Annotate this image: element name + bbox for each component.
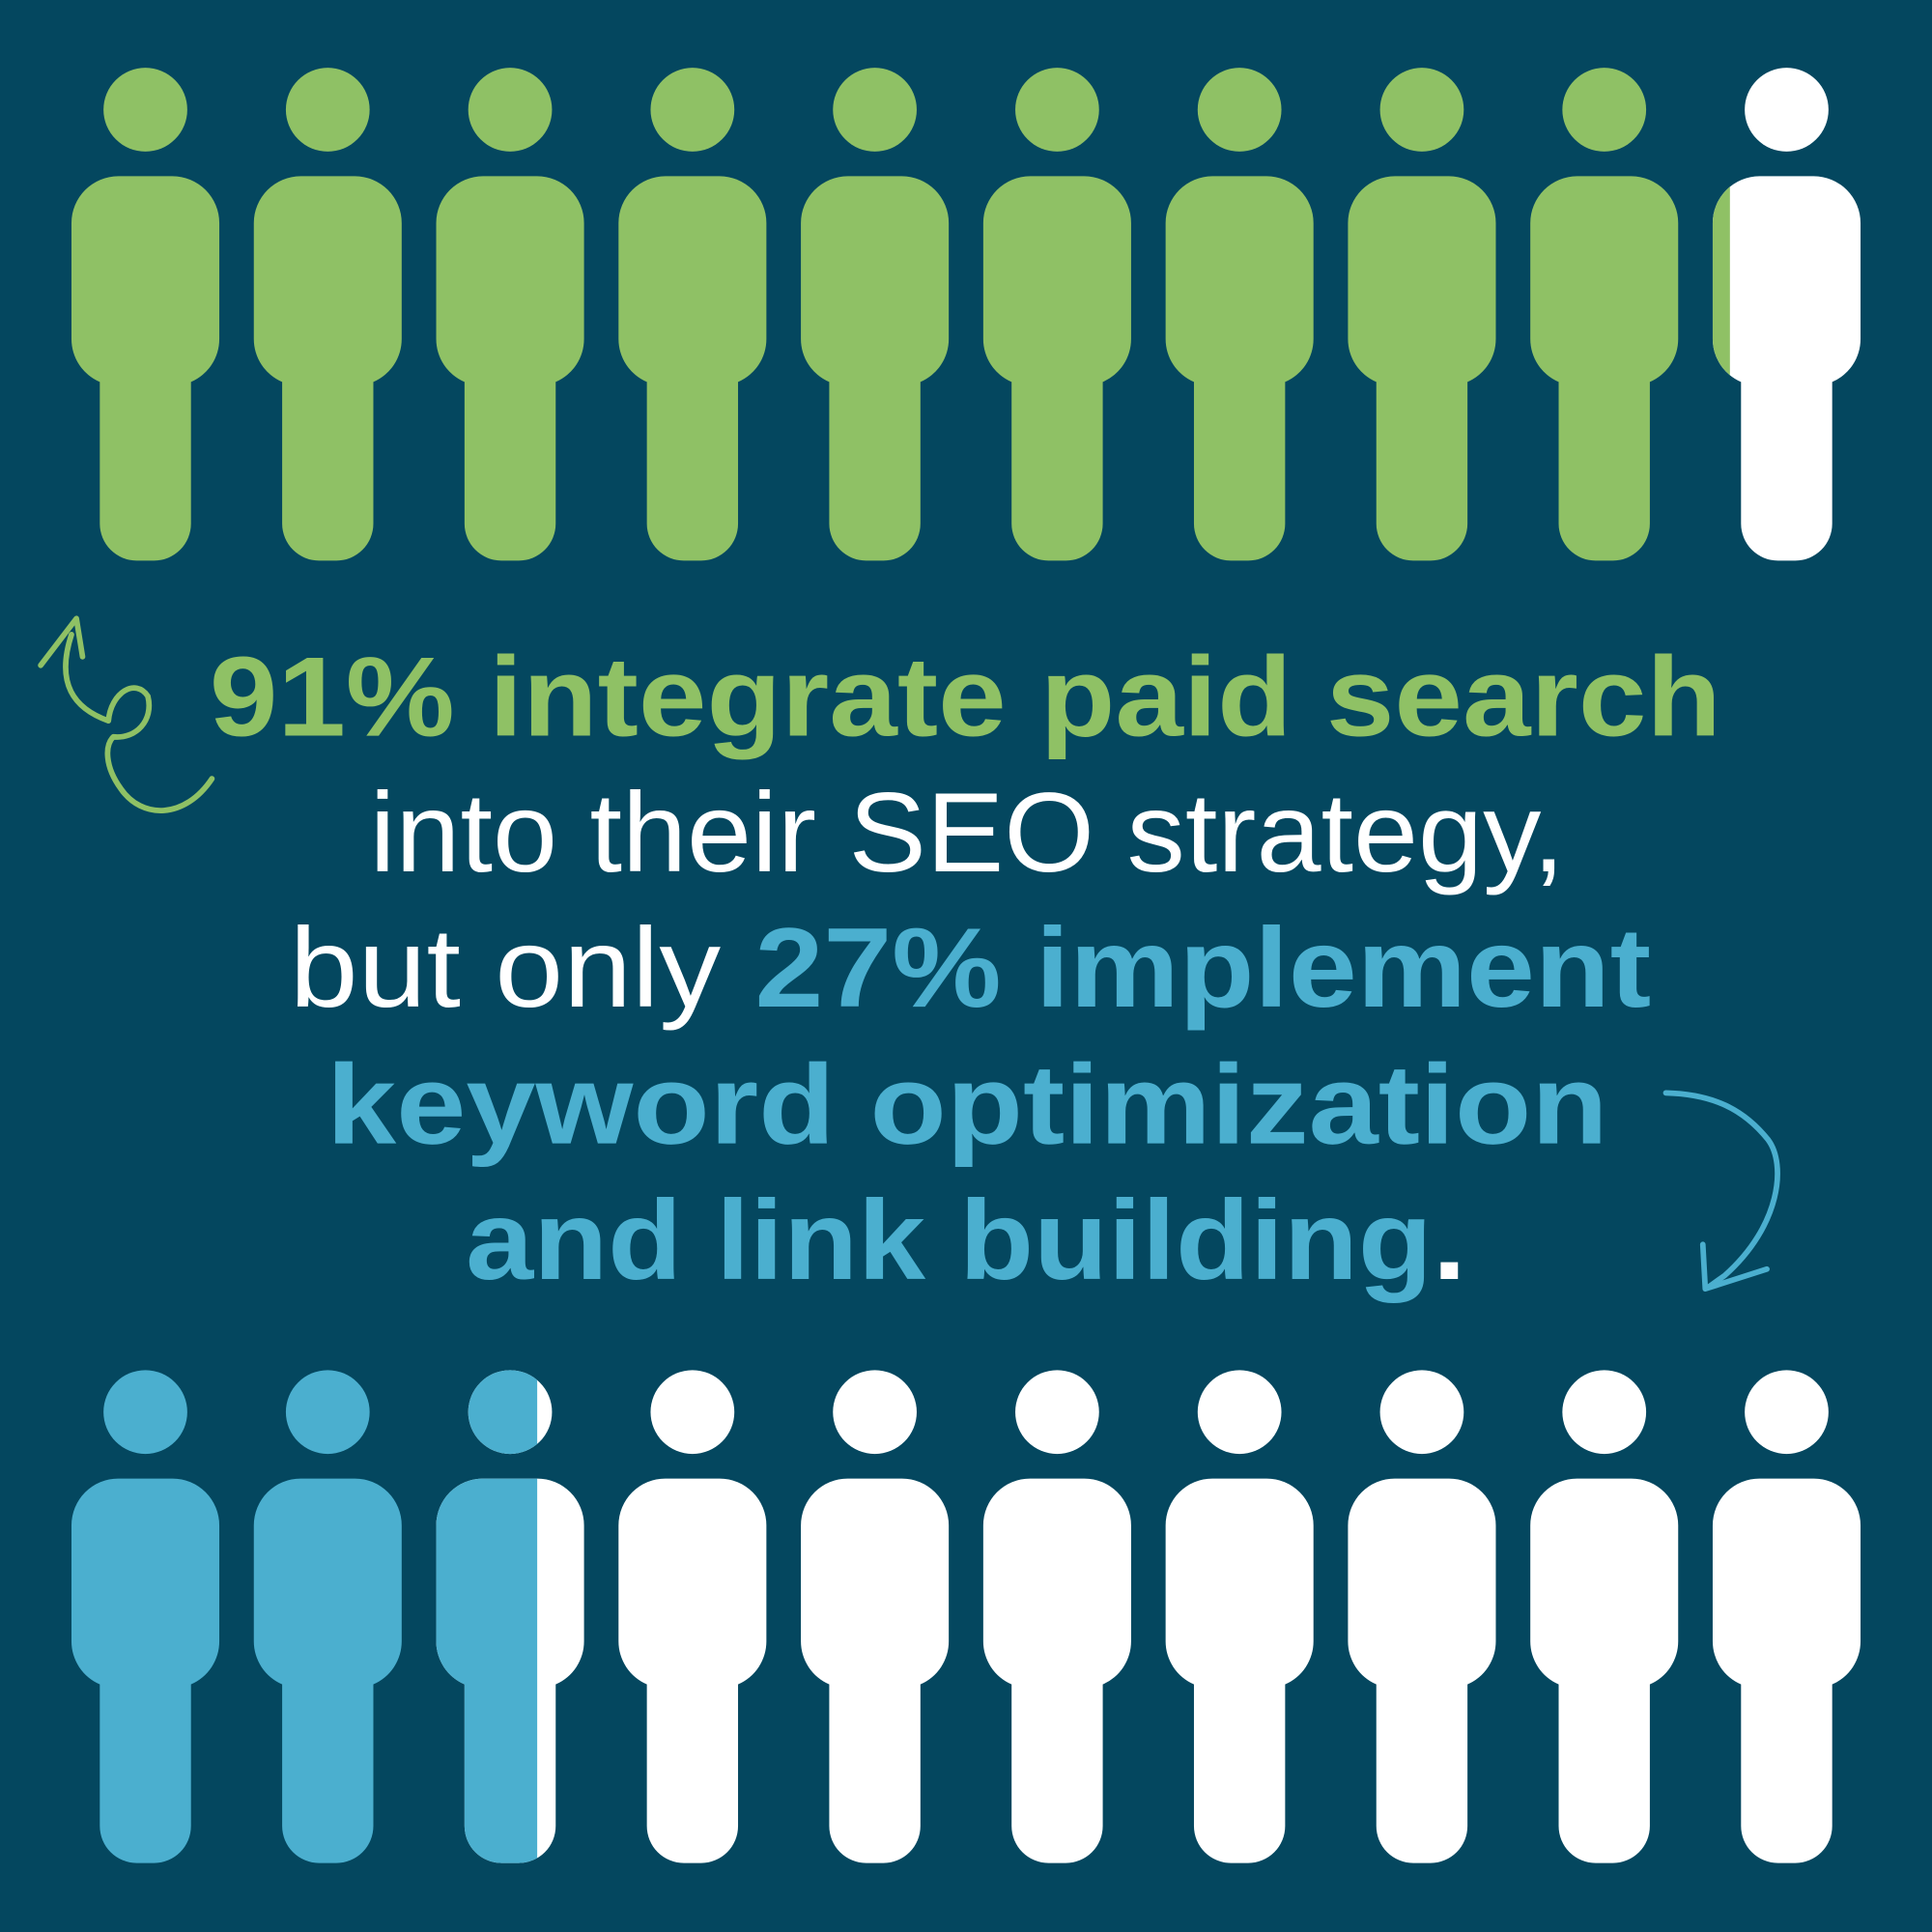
text block: main statement: and link building . <box>466 1177 1466 1303</box>
icon: blue curly arrow <box>1665 1093 1777 1289</box>
text block: main statement: but only 27% implement <box>290 904 1651 1031</box>
row: top figures 91% <box>71 68 1861 560</box>
icon: green curly arrow <box>41 618 212 810</box>
row: bottom figures 27% <box>71 1370 1861 1863</box>
text block: main statement: 91% integrate paid search <box>210 633 1721 759</box>
text block: main statement <box>210 633 1721 1303</box>
text block: main statement: keyword optimization <box>327 1041 1608 1168</box>
text block: main statement: into their SEO strategy, <box>370 769 1565 895</box>
